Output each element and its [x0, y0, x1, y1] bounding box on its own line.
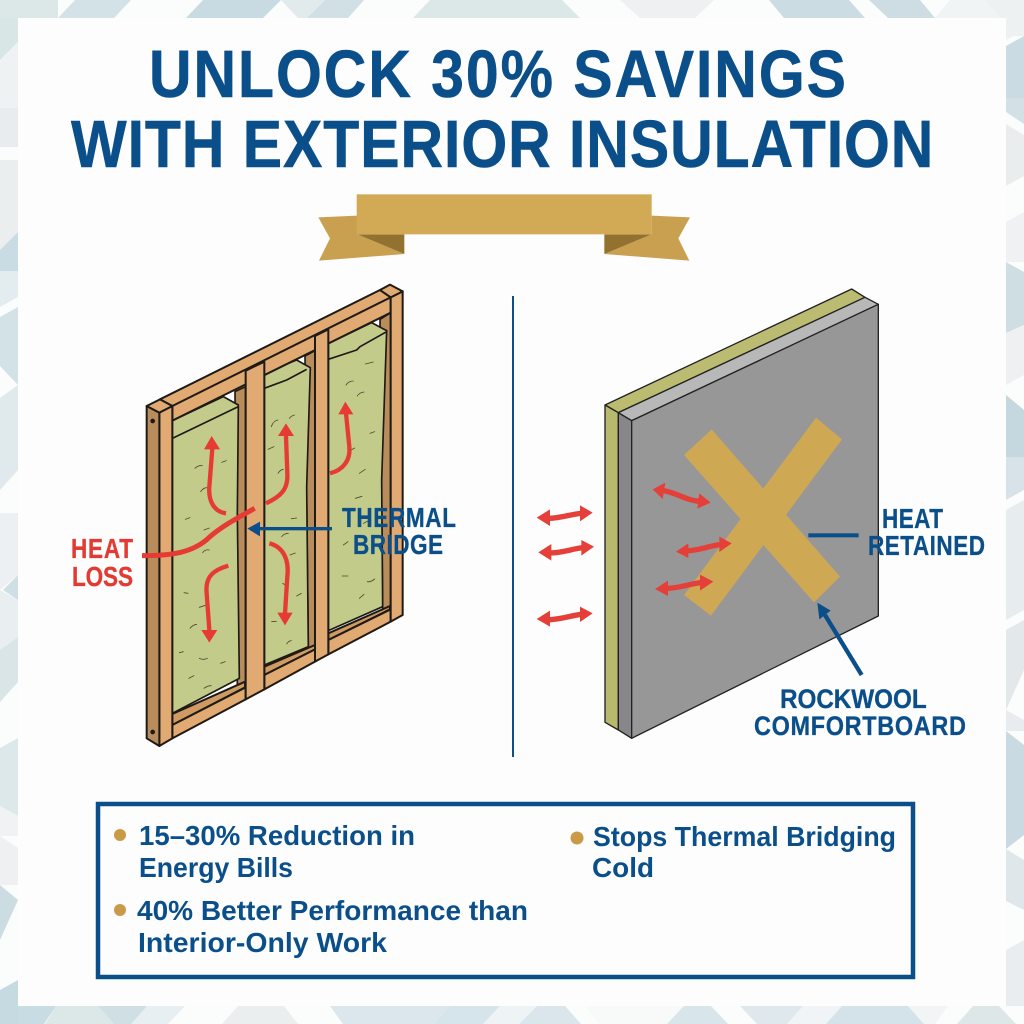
panel: wood-stud wall with cavity insulation	[142, 285, 403, 746]
thermal bridge pointer arrow	[247, 522, 332, 536]
label: heat loss: HEAT	[71, 534, 134, 565]
insulation fibre marks	[179, 362, 375, 688]
red heat flow arrows	[142, 413, 349, 630]
benefit: energy bills: 15–30% Reduction in	[139, 820, 415, 851]
benefit: stops thermal bridging: Cold	[592, 852, 654, 883]
red double-headed arrows	[537, 483, 732, 627]
label: heat retained: HEAT	[882, 504, 944, 535]
red arrowheads	[201, 402, 353, 643]
wall cavity backing and stud side faces	[172, 312, 391, 717]
label: heat retained	[868, 504, 985, 562]
panel divider line	[512, 296, 514, 757]
benefit: stops thermal bridging	[570, 821, 896, 883]
heat retained pointer line	[808, 533, 859, 537]
label: heat retained: RETAINED	[868, 531, 985, 562]
rockwool pointer arrow	[817, 603, 862, 675]
label: thermal bridge: BRIDGE	[353, 530, 443, 561]
benefit: better performance: Interior-Only Work	[138, 927, 387, 958]
title	[71, 38, 933, 182]
panel: exterior insulated wall	[537, 289, 878, 738]
gold ribbon banner	[318, 194, 690, 261]
benefit: energy bills	[114, 820, 415, 883]
nail holes	[150, 419, 155, 734]
label: rockwool comfortboard	[754, 685, 966, 741]
title: WITH EXTERIOR INSULATION	[71, 108, 933, 182]
benefit: better performance	[114, 895, 528, 958]
wood frame	[147, 285, 403, 746]
insulation batts	[172, 323, 387, 713]
gold X mark	[684, 418, 842, 616]
label: thermal bridge: THERMAL	[342, 503, 456, 534]
title: UNLOCK 30% SAVINGS	[149, 38, 846, 112]
benefit: stops thermal bridging: Stops Thermal Bridging	[593, 821, 896, 852]
benefit: energy bills: Energy Bills	[139, 852, 293, 883]
label: thermal bridge	[342, 503, 456, 561]
benefit: better performance: 40% Better Performance than	[137, 895, 528, 926]
layered board	[605, 289, 878, 738]
label: rockwool comfortboard: ROCKWOOL	[780, 685, 927, 714]
label: heat loss	[71, 534, 134, 593]
panel: key benefits box	[98, 804, 913, 977]
label: rockwool comfortboard: COMFORTBOARD	[754, 712, 966, 741]
label: heat loss: LOSS	[72, 562, 133, 593]
